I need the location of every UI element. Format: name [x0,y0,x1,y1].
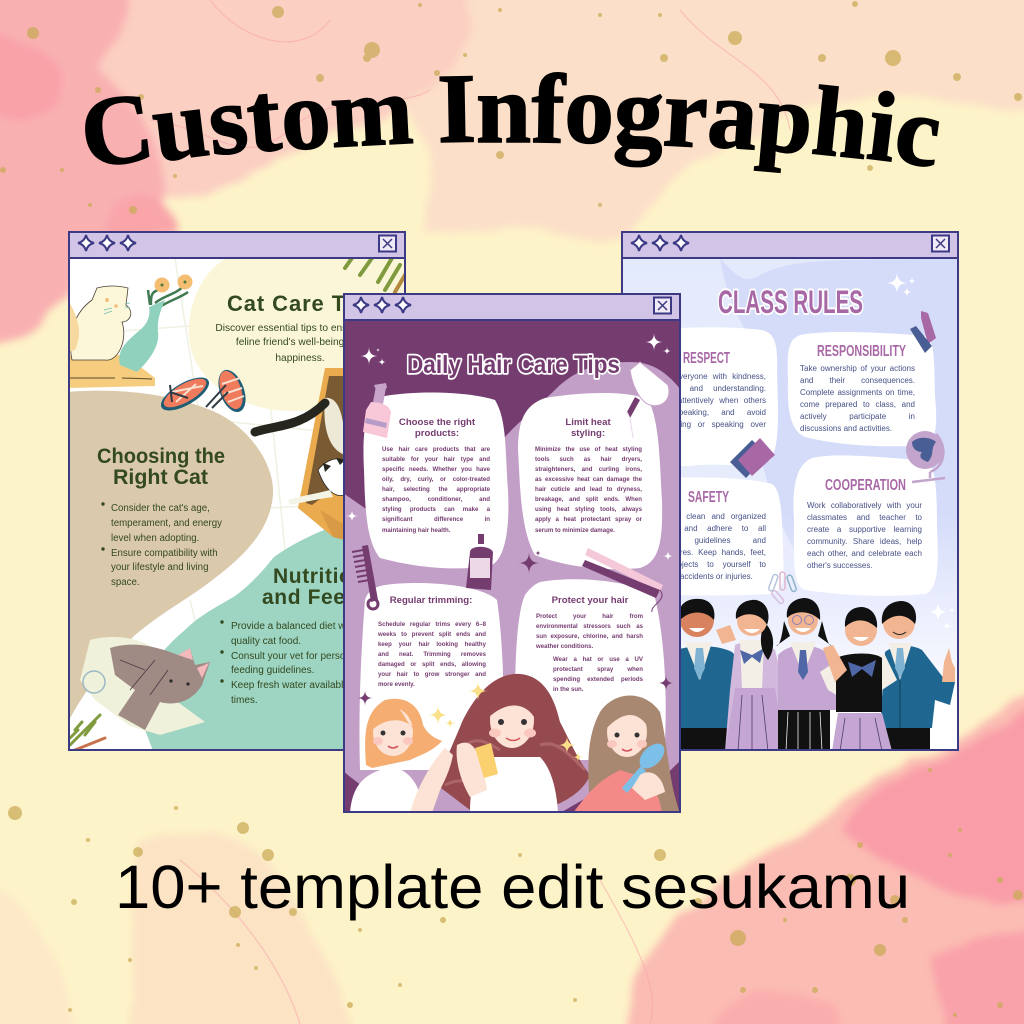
illustration: group of students [681,598,955,749]
heading: Choose the right products: Choose the right [399,417,476,428]
title bar [621,231,959,259]
icon: serum bottle [466,534,493,590]
text: choosing bullets: Ensure compatibility with [111,548,218,559]
title bar [343,293,681,321]
text: protect tip: spending extended periods [553,676,643,683]
text: protect body: sun exposure, chlorine, and harsh [536,633,643,640]
card: Respect [640,327,778,466]
icon: grey cat with blanket [80,637,210,735]
student 5 [880,601,955,751]
text: respect body: are speaking, and avoid [651,408,766,417]
card: Choose the right products [363,393,508,568]
icon: white cat [68,286,131,360]
sparkles [428,681,583,762]
text: protect body: environmental stressors such as [536,623,643,630]
text: limit heat body: as excessive heat can damage the [535,476,642,483]
text: intro: feline friend's well-being and [236,337,364,348]
text: cooperation body: classmates and teacher to [807,513,922,522]
heading: Choose the right products [399,417,476,439]
icon: books [730,438,775,478]
student 2 [725,600,785,751]
illustration: three women [350,674,679,811]
text: limit heat body: Minimize the use of heat styling [535,446,642,453]
text: protect body [536,613,643,650]
text: choose products body: Use hair care products that are [382,446,490,453]
text: protect tip [553,656,643,693]
text: choose products body: specific needs. Whether you have [382,466,490,473]
text: safety body: space, and adhere to all [651,524,766,533]
text: intro [215,323,385,364]
heading: Limit heat styling: Limit heat [565,417,611,428]
text: protect tip: protectant spray when [553,666,643,673]
heading: Nutrition and Feeding [262,565,392,609]
hair care background and cards [345,321,679,811]
icon: basket with cat [255,368,345,540]
text: trimming body: keep your hair looking healthy [378,641,486,648]
text: safety body: safety guidelines and [651,536,766,545]
text: limit heat body: tools such as hair dryers, [535,456,642,463]
card: Regular trimming [359,583,504,770]
text: nutrition bullets: Provide a balanced diet with high- [231,621,381,632]
text: choosing bullets: Consider the cat's age, [111,503,210,514]
text: choose products body: hair, selecting the appropriate [382,486,490,493]
window frame [343,293,681,813]
card: Cooperation [793,455,938,596]
tan blob [68,391,273,722]
text: choose products body: shampoo, conditioner, and [382,496,490,503]
text: limit heat body: breakage, and split ends. When [535,496,642,503]
text: cooperation body: each other, and celebrate each [807,549,922,558]
text: limit heat body: using heat styling tools, always [535,506,642,513]
text: trimming body: and neat. Trimming removes [378,651,486,658]
text: choose products body: suitable for your hair type and [382,456,490,463]
heading: Cat Care Tips: Cat Care Tips [227,291,380,316]
student 4 [820,607,897,751]
icon: vase with flowers [119,274,192,372]
icon: shelf [68,355,155,388]
text: choose products body [382,446,490,534]
icon: crayons [910,311,936,353]
icon: paper clips [768,572,797,604]
card: Protect your hair [515,579,666,760]
card: Responsibility [788,332,936,446]
cream blob [189,258,406,411]
text: respect body: interrupting or speaking over [651,420,766,429]
panel: class rules template [621,231,959,751]
heading: Choosing the Right Cat: Choosing the [97,445,225,468]
heading: Choosing the Right Cat: Right Cat [113,466,208,489]
heading: Safety: SAFETY [688,489,729,506]
text: nutrition bullets: quality cat food. [231,636,301,647]
text: respect body: Listen attentively when others [651,396,766,405]
heading: Choose the right products: products: [415,428,459,439]
heading: Cooperation: COOPERATION [825,477,906,494]
leaves top right [345,258,405,292]
text: responsibility body: and their consequences. [800,376,915,385]
heading: Regular trimming: Regular trimming: [390,595,472,606]
text: respect body [651,372,766,441]
heading: Nutrition and Feeding: Nutrition [273,565,366,588]
text: respect body: Treat everyone with kindness, [651,372,766,381]
text: protect tip: Wear a hat or use a UV [553,656,643,663]
text: safety body: prevent accidents or injuries. [651,572,753,581]
heading: Protect your hair: Protect your hair [552,595,629,606]
text: cooperation body [807,501,922,570]
card: Safety [640,477,784,596]
text: responsibility body: Take ownership of your actions [800,364,915,373]
heading: Nutrition and Feeding: and Feeding [262,586,392,609]
text: limit heat body: serum to minimize damage. [535,527,615,534]
text: choosing bullets: space. [111,577,140,588]
heading: CLASS RULES: CLASS RULES [718,284,863,320]
text: nutrition bullets: Consult your vet for personalized [231,651,377,662]
text: safety body: and objects to yourself to [651,560,766,569]
text: safety body: Keep a clean and organized [651,512,766,521]
woman: brown hair with brush [573,696,680,813]
sparkles [346,333,673,561]
icon: comb [352,545,378,609]
caption: 10+ template edit sesukamu: 10+ template edit sesukamu [115,853,910,921]
text: choosing bullets: your lifestyle and living [111,562,208,573]
title bar [68,231,406,259]
student 3 [776,598,838,751]
card: Limit heat styling [518,393,662,569]
panel: cat care template [68,231,406,751]
text: responsibility body: Complete assignments on time, [800,388,915,397]
cat care artwork and text [70,259,404,749]
text: trimming body: more evenly. [378,681,415,688]
text: limit heat body: apply a heat protectant spray or [535,516,642,523]
text: cooperation body: community. Share ideas, help [807,537,922,546]
text: choose products body: maintaining hair health. [382,527,450,534]
woman: red wavy hair [437,674,590,813]
text: cooperation body: create a supportive learning [807,525,922,534]
text: protect tip: in the sun. [553,686,583,693]
text: choosing bullets: temperament, and energy [111,518,222,529]
text: intro: Discover essential tips to ensure your [215,323,385,334]
text: nutrition bullets: times. [231,695,258,706]
text: limit heat body [535,446,642,534]
text: trimming body: damaged or split ends, allowing [378,661,486,668]
icon: hair straightener [582,548,663,612]
icon: flip-flops [156,366,251,417]
text: protect body: Protect your hair from [536,613,643,620]
text: nutrition bullets: feeding guidelines. [231,665,314,676]
text: protect body: weather conditions. [536,643,593,650]
text: nutrition bullets [220,620,381,706]
text: trimming body: Schedule regular trims every 6–8 [378,621,486,628]
text: choose products body: oily, dry, curly, or color-treated [382,476,490,483]
text: safety body [651,512,766,581]
text: limit heat body: hair cuticle and lead to dryness, [535,486,642,493]
text: trimming body: weeks to prevent split ends and [378,631,486,638]
woman: orange hair [350,699,453,813]
panel: hair care template [343,293,681,813]
heading: Daily Hair Care Tips: Daily Hair Care Tips [407,351,620,379]
text: respect body: respect, and understanding. [651,384,766,393]
text: cooperation body: other's successes. [807,561,873,570]
text: respect body: others. [651,432,675,441]
text: safety body: procedures. Keep hands, feet, [651,548,766,557]
heading: Responsibility: RESPONSIBILITY [817,343,906,360]
window frame [68,231,406,751]
text: responsibility body: actively participate in [800,412,915,421]
icon: pink bottle [363,383,391,438]
text: responsibility body: discussions and activities. [800,424,892,433]
text: limit heat body: straighteners, and curling irons, [535,466,642,473]
heading: Custom Infographic: Custom Infographic [74,54,948,190]
icon: globe [906,431,945,482]
student 1 [660,599,750,751]
sparkles [886,272,955,631]
heading: Limit heat styling [565,417,611,439]
icon: leaves bottom left [70,715,105,750]
heading: Respect: RESPECT [683,350,730,367]
text: choosing bullets [101,502,222,588]
text: trimming body: your hair to grow stronger and [378,671,486,678]
heading: Choosing the Right Cat [97,445,225,489]
text: responsibility body [800,364,915,433]
text: intro: happiness. [275,353,325,364]
heading: Limit heat styling: styling: [571,428,605,439]
teal blob [130,510,406,751]
text: cooperation body: Work collaboratively with your [807,501,922,510]
text: choose products body: significant difference in [382,516,490,523]
text: trimming body [378,621,486,688]
text: choose products body: styling products can make a [382,506,490,513]
class rules background and cards [623,259,957,672]
text: choosing bullets: level when adopting. [111,533,199,544]
icon: hair dryer [627,362,669,438]
window frame [621,231,959,751]
text: nutrition bullets: Keep fresh water available at all [231,680,373,691]
text: responsibility body: come prepared to class, and [800,400,915,409]
